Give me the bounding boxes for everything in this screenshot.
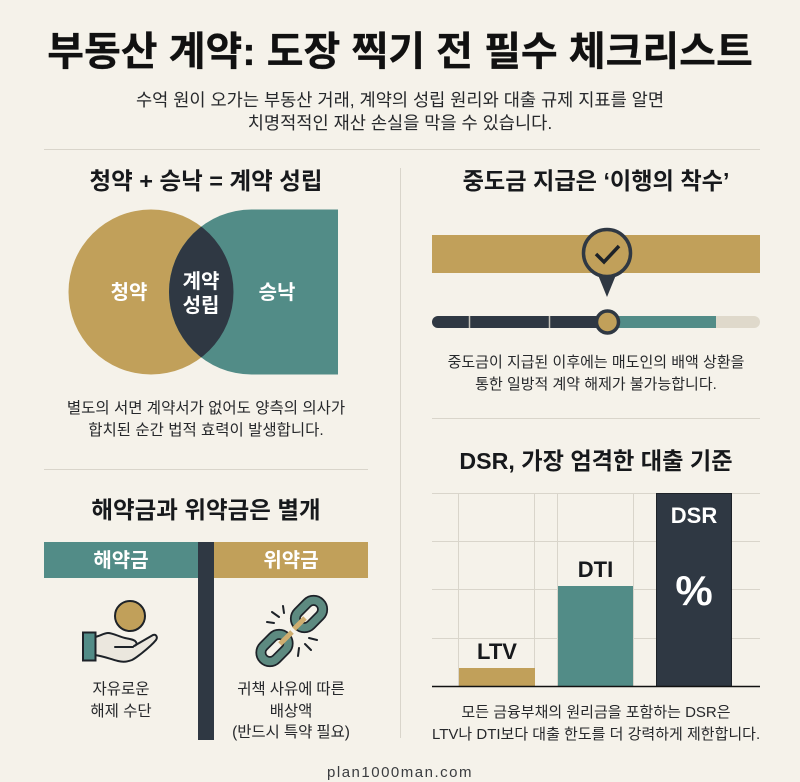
label: damages: 배상액 [270, 702, 312, 720]
center divider [198, 542, 214, 740]
venn diagram: 성립 [183, 294, 219, 317]
title: 부동산 계약: 도장 찍기 전 필수 체크리스트 [47, 30, 753, 74]
body text: offer and acceptance: 합치된 순간 법적 효력이 발생합니다. [88, 422, 324, 439]
heading: interim payment: 중도금 지급은 ‘이행의 착수’ [463, 168, 729, 194]
body text: DSR [432, 704, 760, 742]
panel: offer and acceptance [67, 168, 345, 439]
heading: offer and acceptance: 청약 + 승낙 = 계약 성립 [89, 168, 323, 194]
subtitle: 수억 원이 오가는 부동산 거래, 계약의 성립 원리와 대출 규제 지표를 알면 [136, 90, 664, 110]
body text: offer and acceptance: 별도의 서면 계약서가 없어도 양측의 의사가 [67, 400, 345, 417]
body text: interim payment: 통한 일방적 계약 해제가 불가능합니다. [475, 376, 717, 392]
label: free cancellation: 해제 수단 [90, 703, 152, 720]
venn diagram: 청약 [111, 281, 147, 304]
label: damages: (반드시 특약 필요) [232, 724, 350, 741]
label: free cancellation [90, 681, 152, 720]
body text: interim payment [448, 354, 744, 392]
panel: interim payment [432, 168, 760, 392]
panel: DSR [432, 448, 760, 742]
header: cancellation deposit: 해약금 [93, 550, 149, 572]
footer source: plan1000man.com [327, 764, 473, 781]
body text: DSR: LTV나 DTI보다 대출 한도를 더 강력하게 제한합니다. [432, 726, 760, 742]
venn diagram: 계약 [183, 270, 219, 293]
label: damages: 귀책 사유에 따른 [237, 681, 345, 698]
header: penalty: 위약금 [263, 550, 319, 572]
venn diagram [68, 210, 338, 374]
panel: cancellation deposit vs penalty [44, 497, 368, 741]
label: damages [232, 681, 350, 741]
icon: hand with coin [82, 600, 158, 663]
bar chart: % [675, 567, 713, 614]
heading: DSR: DSR, 가장 엄격한 대출 기준 [459, 448, 733, 474]
subtitle [136, 90, 664, 133]
bar chart: DSR [671, 503, 717, 528]
heading: deposit vs penalty: 해약금과 위약금은 별개 [91, 497, 321, 523]
bar chart: LTV [477, 639, 517, 664]
bar chart: DTI [578, 557, 613, 582]
bar chart [432, 493, 760, 688]
label: free cancellation: 자유로운 [92, 681, 150, 698]
body text: DSR: 모든 금융부채의 원리금을 포함하는 DSR은 [461, 704, 731, 721]
timeline graphic [432, 228, 760, 335]
header: penalty [214, 542, 368, 578]
venn diagram: 승낙 [259, 281, 295, 304]
body text: offer and acceptance [67, 400, 345, 439]
icon: broken chain [255, 594, 328, 668]
subtitle: 치명적적인 재산 손실을 막을 수 있습니다. [248, 113, 552, 133]
body text: interim payment: 중도금이 지급된 이후에는 매도인의 배액 상환을 [448, 354, 744, 371]
header: cancellation deposit [44, 542, 198, 578]
